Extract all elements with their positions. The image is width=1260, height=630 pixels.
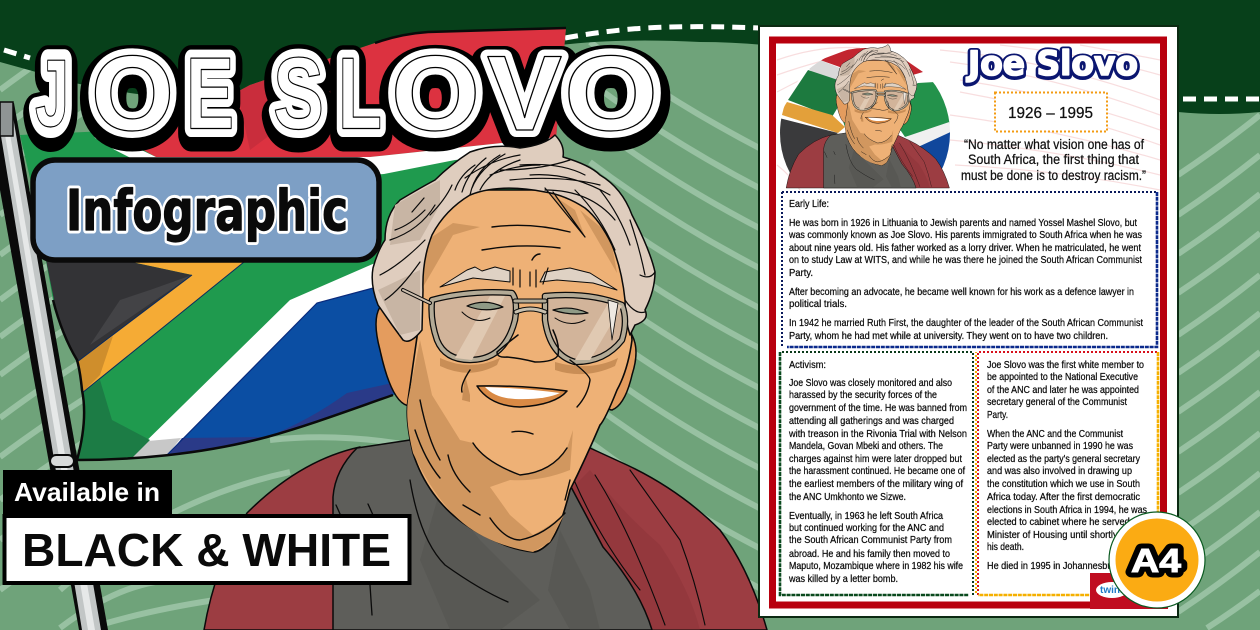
panel: career: Minister of Housing until shortly before <box>987 530 1147 541</box>
panel: career: be appointed to the National Executive <box>987 372 1138 383</box>
panel: activism: harassed by the security forces of the <box>789 390 937 401</box>
available in label <box>3 470 172 516</box>
title white layer: O <box>391 33 480 153</box>
panel: activism: Maputo, Mozambique where in 1982 his wife <box>789 561 963 572</box>
title: JOE SLOVO <box>35 33 658 158</box>
flag: South African flag <box>20 26 566 462</box>
title white layer: O <box>91 33 174 153</box>
title inline layer: O <box>91 33 174 153</box>
title inline layer: V <box>487 33 562 153</box>
title white layer: S <box>273 36 324 150</box>
panel: activism: the ANC Umkhonto we Sizwe. <box>789 492 906 503</box>
glasses <box>403 290 625 362</box>
quote: “No matter what vision one has of <box>964 137 1144 152</box>
quote: South Africa, the first thing that <box>968 152 1139 167</box>
title white layer: V <box>487 33 562 153</box>
title outline layer: S <box>273 42 324 156</box>
quote <box>961 137 1146 183</box>
forehead lines <box>482 225 570 260</box>
title inline layer: E <box>186 36 234 150</box>
panel: career: Africa today. After the first democratic <box>987 492 1140 503</box>
infographic halo text: Infographic <box>66 179 348 244</box>
portrait: Joe Slovo illustration <box>204 135 767 630</box>
face <box>407 190 632 552</box>
panel: career: Joe Slovo was the first white member to <box>987 360 1144 371</box>
title white layer <box>35 33 658 153</box>
title inline layer <box>35 33 658 153</box>
title inline layer: S <box>273 36 324 150</box>
title outline layer: E <box>186 42 234 156</box>
panel: early life <box>782 192 1157 347</box>
panel: activism: with treason in the Rivonia Trial with Nelson <box>788 429 967 440</box>
twinkl logo corner: twinkl <box>1100 585 1129 596</box>
panel: early life: political trials. <box>789 299 847 310</box>
panel: career <box>976 352 1158 595</box>
title white layer: O <box>564 33 658 153</box>
panel: early life: Party, whom he had met while at university. They went on to have two children. <box>789 331 1108 342</box>
poster title: Joe Slovo <box>966 44 1138 84</box>
panel: activism: abroad. He and his family then moved to <box>789 549 950 560</box>
ears <box>376 307 422 406</box>
panel: early life: about nine years old. His father worked as a lorry driver. When he matriculated, he went <box>789 243 1141 254</box>
poster: A4 infographic preview <box>759 26 1178 617</box>
panel: activism <box>780 352 973 595</box>
panel: early life: was commonly known as Joe Slovo. His parents immigrated to South Africa when he was <box>788 230 1142 241</box>
panel: activism: was killed by a letter bomb. <box>788 574 898 585</box>
panel: career: elected as the party's general secretary <box>987 454 1140 465</box>
panel: career: elected to cabinet where he served as <box>987 517 1142 528</box>
panel: career: of the ANC and later he was appointed <box>987 385 1139 396</box>
black and white label: BLACK & WHITE <box>22 524 391 576</box>
panel: career: his death. <box>987 542 1024 553</box>
panel: early life: on to study Law at WITS, and while he was there he joined the South African Communist <box>789 255 1142 266</box>
mini portrait <box>786 44 949 188</box>
twinkl logo corner <box>1090 573 1168 609</box>
panel: early life: Party. <box>789 268 813 279</box>
poster title shadow: Joe Slovo <box>966 45 1138 85</box>
panel: career: secretary general of the Communist <box>987 397 1127 408</box>
panel: activism: Mandela, Govan Mbeki and others. The <box>789 441 943 452</box>
eyebrows <box>440 267 617 290</box>
available in label: Available in <box>14 477 160 507</box>
face lines <box>415 360 590 540</box>
infographic label pill <box>33 160 379 260</box>
badge: A4 <box>1109 512 1205 608</box>
badge: A4: A4 <box>1131 542 1182 579</box>
panel: career: elections in South Africa in 1994, he was <box>987 505 1147 516</box>
title white layer: J <box>35 40 69 147</box>
dates box: 1926 – 1995 <box>1008 105 1093 122</box>
title outline layer: J <box>35 45 69 152</box>
pink wave pattern <box>777 45 1160 190</box>
quote: must be done is to destroy racism.” <box>961 168 1146 183</box>
title inline layer: L <box>338 36 382 150</box>
panel: career: When the ANC and the Communist <box>987 429 1123 440</box>
panel: activism: Joe Slovo was closely monitored and also <box>789 378 952 389</box>
panel: activism: but continued working for the ANC and <box>789 523 944 534</box>
shirt <box>333 440 652 630</box>
dates box <box>995 92 1107 132</box>
badge: A4: A4 <box>1131 542 1182 579</box>
title inline layer: O <box>391 33 480 153</box>
panel: career: Party. <box>987 410 1008 421</box>
panel: activism: charges against him were later dropped but <box>789 454 962 465</box>
mouth <box>477 386 567 407</box>
title outline layer <box>35 38 658 158</box>
panel: career: and was also involved in drawing up <box>987 466 1132 477</box>
title outline layer: O <box>564 38 658 158</box>
poster sheet <box>759 26 1178 617</box>
panel: activism: the harassment continued. He became one of <box>789 466 965 477</box>
panel: activism: Activism: <box>789 360 826 371</box>
title outline layer: L <box>338 42 382 156</box>
panel: early life: He was born in 1926 in Lithuania to Jewish parents and named Yossel Mashel Slovo, but <box>789 218 1137 229</box>
dark green top wave <box>0 0 1260 114</box>
hair <box>372 135 655 341</box>
panel: career: Party were unbanned in 1990 he was <box>987 441 1133 452</box>
face shadows <box>407 340 573 552</box>
portrait circle flag <box>780 48 950 173</box>
title inline layer: J <box>35 40 69 147</box>
title inline layer: O <box>564 33 658 153</box>
title outline layer: O <box>91 38 174 158</box>
shawl <box>204 447 767 630</box>
panel: activism: the South African Communist Party from <box>789 535 952 546</box>
panel: career: the constitution which we use in South <box>987 479 1140 490</box>
panel: early life: In 1942 he married Ruth First, the daughter of the leader of the South African Communist <box>789 318 1143 329</box>
infographic text: Infographic <box>66 179 348 244</box>
panel: early life: After becoming an advocate, he became well known for his work as a defence lawyer in <box>789 287 1134 298</box>
panel: early life: Early Life: <box>789 199 829 210</box>
title white layer: L <box>338 36 382 150</box>
panel: activism: Eventually, in 1963 he left South Africa <box>789 511 943 522</box>
title outline layer: O <box>391 38 480 158</box>
panel: career: He died in 1995 in Johannesburg. <box>987 561 1123 572</box>
panel: activism: attending all gatherings and was charged <box>789 416 954 427</box>
title white layer: E <box>186 36 234 150</box>
panel: activism: the earliest members of the military wing of <box>789 479 963 490</box>
title outline layer: V <box>487 38 562 158</box>
nose <box>497 330 558 362</box>
panel: activism: government of the time. He was banned from <box>789 403 967 414</box>
icon: flag pole <box>0 102 108 630</box>
